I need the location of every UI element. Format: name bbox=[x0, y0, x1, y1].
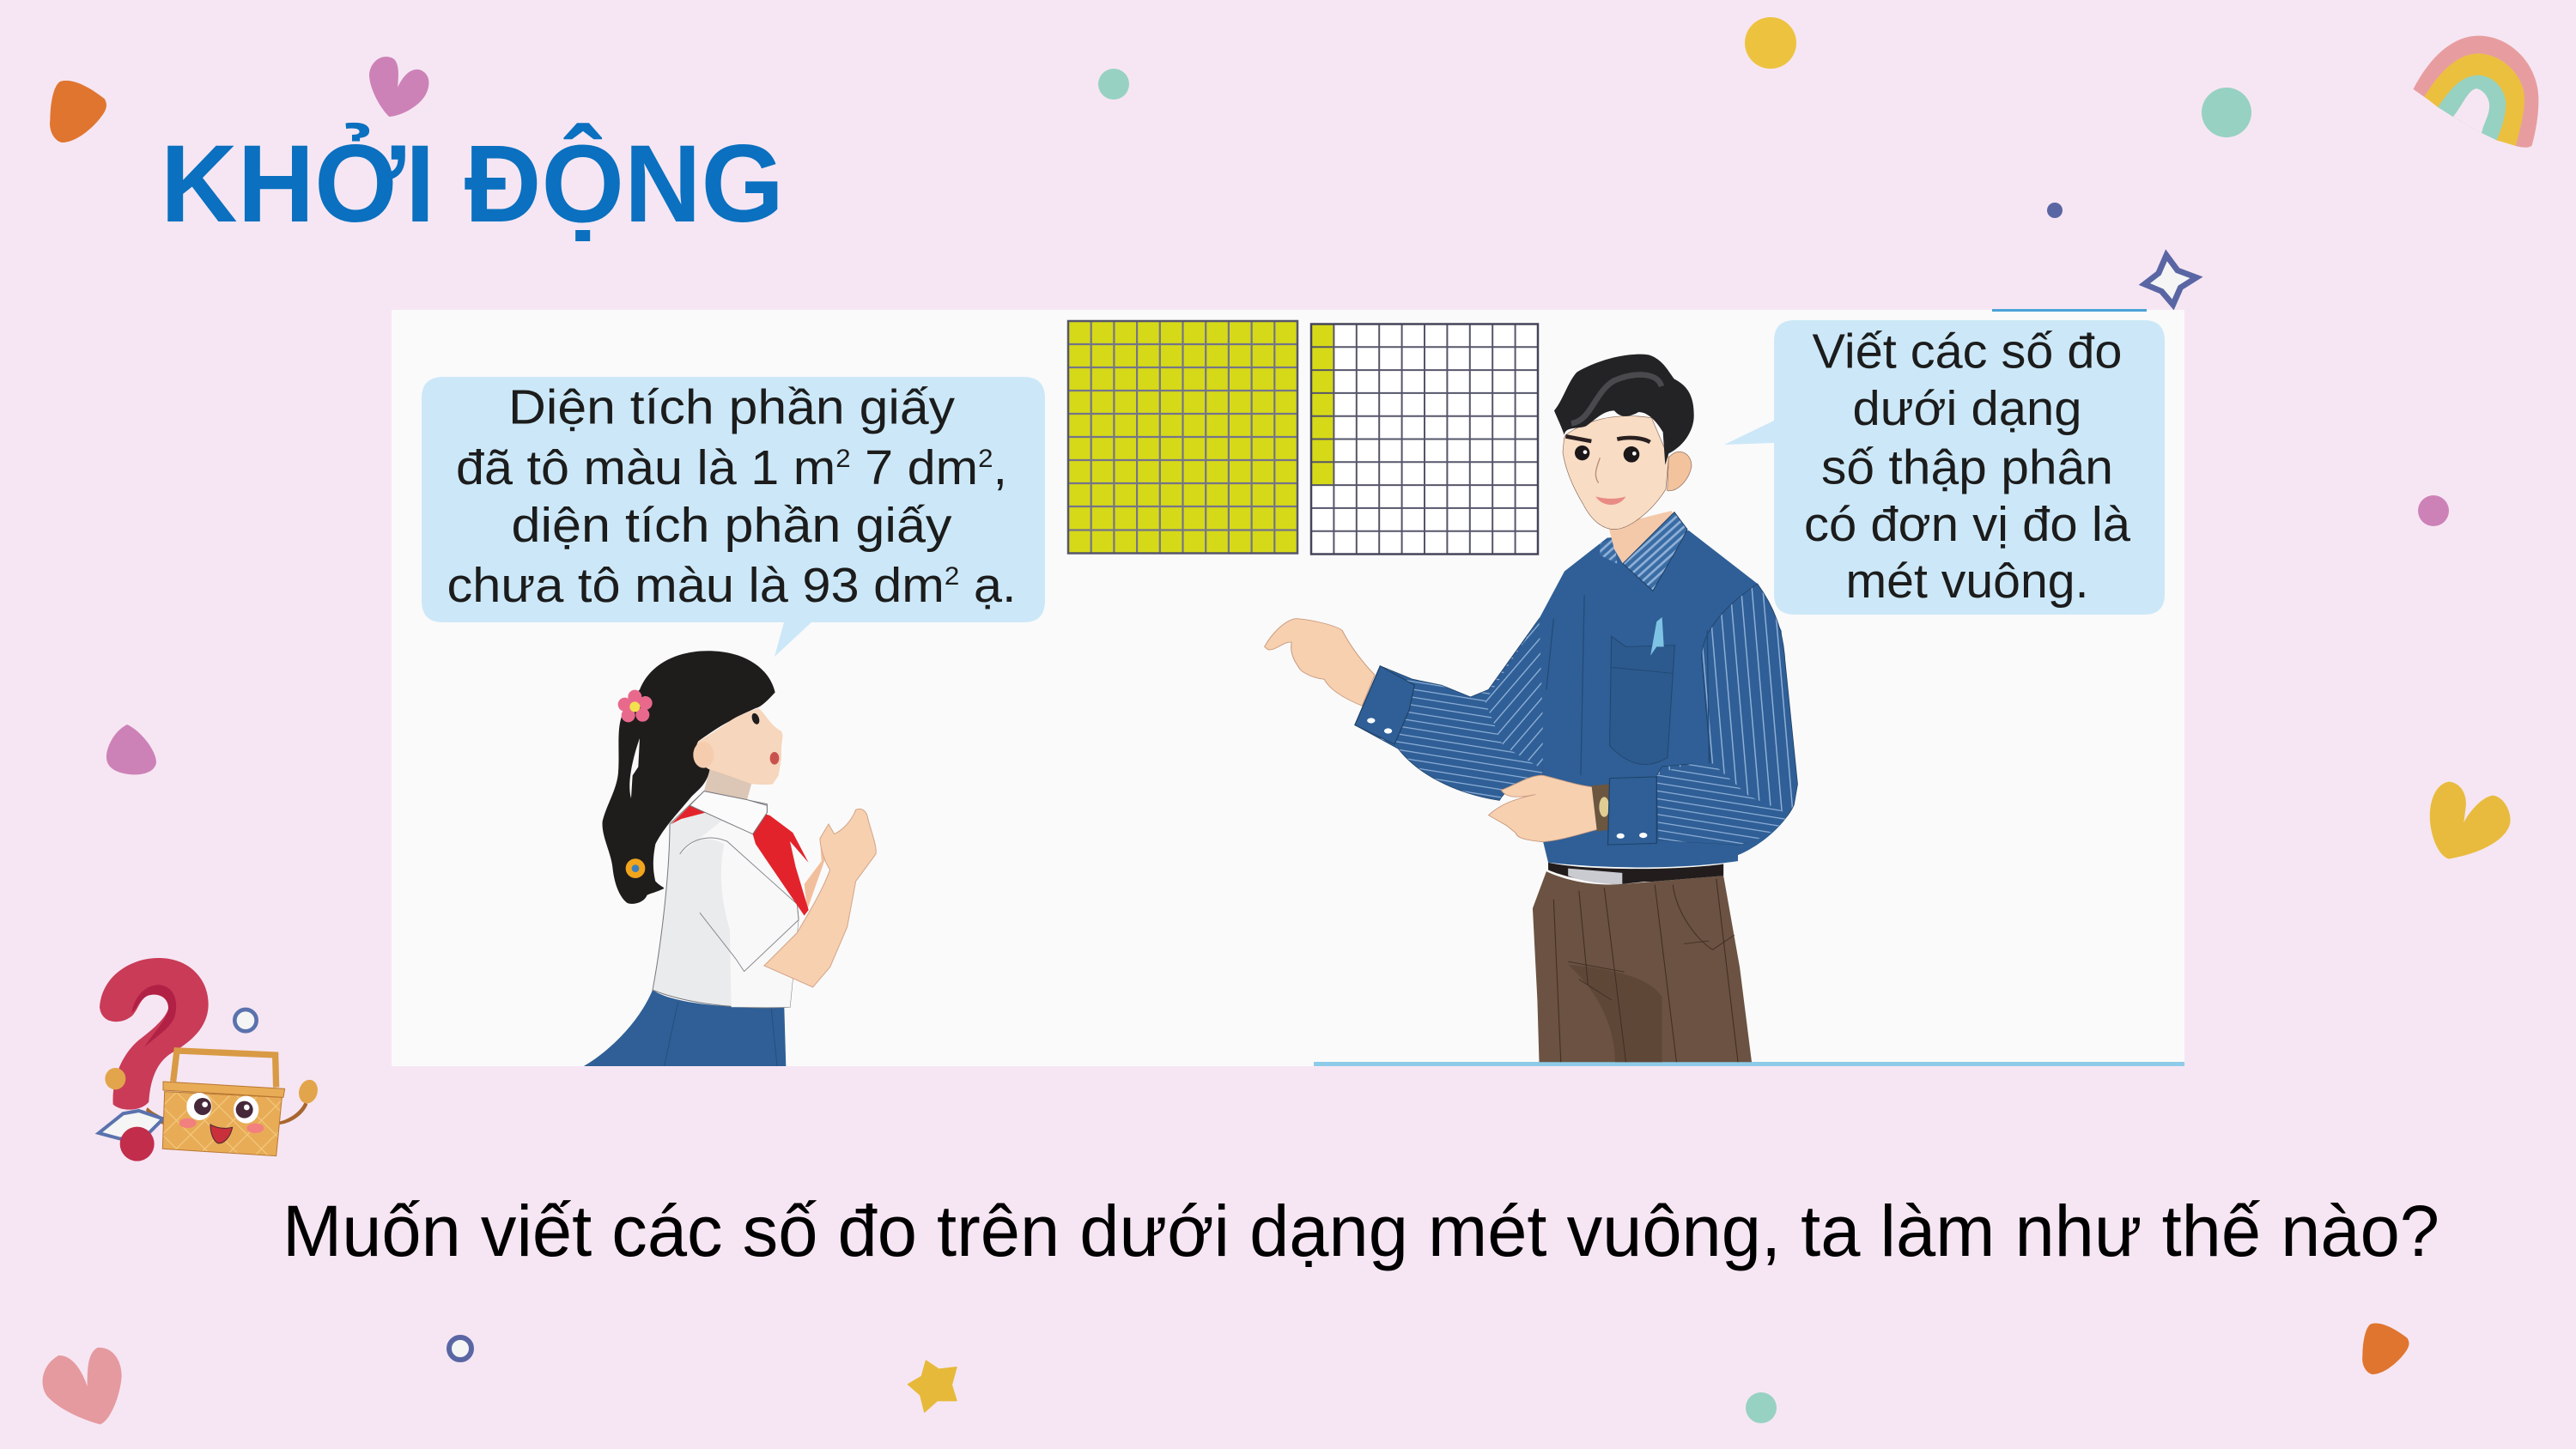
title: KHỞI ĐỘNG bbox=[161, 123, 784, 246]
callout: teacher speech bubble: dưới dạng bbox=[1853, 381, 2081, 436]
icon: pink heart bottom left bbox=[43, 1348, 122, 1424]
pink flower bbox=[618, 690, 653, 722]
callout: teacher speech bubble: số thập phân bbox=[1821, 440, 2113, 494]
text block: question: Muốn viết các số đo trên dưới dạng mét vuông, ta làm như thế nào? bbox=[283, 1191, 2439, 1271]
callout: girl speech bubble: 2 bbox=[978, 445, 993, 473]
callout: teacher speech bubble bbox=[1724, 320, 2165, 615]
illustration: schoolgirl bbox=[584, 651, 876, 1066]
chart: fully coloured square grid bbox=[1068, 321, 1297, 553]
callout: girl speech bubble: 7 dm bbox=[851, 440, 978, 495]
callout: girl speech bubble: Diện tích phần giấy bbox=[508, 379, 956, 434]
chart: partially coloured square grid bbox=[1311, 324, 1538, 555]
icon: teal dot bottom bbox=[1746, 1392, 1777, 1423]
icon: navy dot bbox=[2047, 203, 2063, 218]
callout: teacher speech bubble: Viết các số đo bbox=[1812, 324, 2123, 379]
icon: teal dot bbox=[1098, 69, 1129, 100]
icon: four-point star outline bbox=[2144, 255, 2196, 305]
callout: teacher speech bubble: mét vuông. bbox=[1846, 554, 2088, 609]
callout: girl speech bubble: 2 bbox=[945, 562, 959, 591]
icon: teal dot right bbox=[2202, 88, 2251, 137]
resting hand bbox=[1489, 775, 1601, 842]
callout: girl speech bubble: chưa tô màu là 93 dm bbox=[447, 558, 923, 613]
icon: yellow star bottom bbox=[908, 1361, 957, 1412]
icon: purple heart top bbox=[369, 57, 428, 117]
icon: yellow heart right bbox=[2430, 782, 2511, 859]
callout: girl speech bubble: ạ. bbox=[959, 558, 1017, 613]
panel: illustration bbox=[392, 309, 2184, 1066]
icon: ring bottom bbox=[449, 1337, 471, 1360]
icon: purple dot right bbox=[2418, 495, 2449, 526]
icon: rainbow bbox=[2414, 36, 2538, 148]
icon: orange drop bottom right bbox=[2362, 1323, 2409, 1374]
icon: purple drop left bbox=[106, 724, 156, 774]
icon: yellow dot bbox=[1745, 17, 1796, 69]
callout: girl speech bubble: diện tích phần giấy bbox=[512, 498, 952, 553]
yellow flower bbox=[626, 858, 645, 878]
callout: teacher speech bubble: có đơn vị đo là bbox=[1804, 497, 2130, 552]
callout: girl speech bubble: đã tô màu là 1 m bbox=[456, 440, 821, 495]
illustration: teacher head bbox=[1554, 355, 1694, 591]
callout: girl speech bubble: , bbox=[993, 440, 1007, 495]
icon: basket mascot with question mark bbox=[99, 958, 320, 1161]
illustration: teacher body bbox=[1265, 530, 1797, 1062]
callout: girl speech bubble bbox=[422, 377, 1045, 657]
pointing hand bbox=[1265, 619, 1375, 706]
icon: orange drop top left bbox=[50, 81, 106, 142]
callout: girl speech bubble: 2 bbox=[835, 445, 851, 473]
